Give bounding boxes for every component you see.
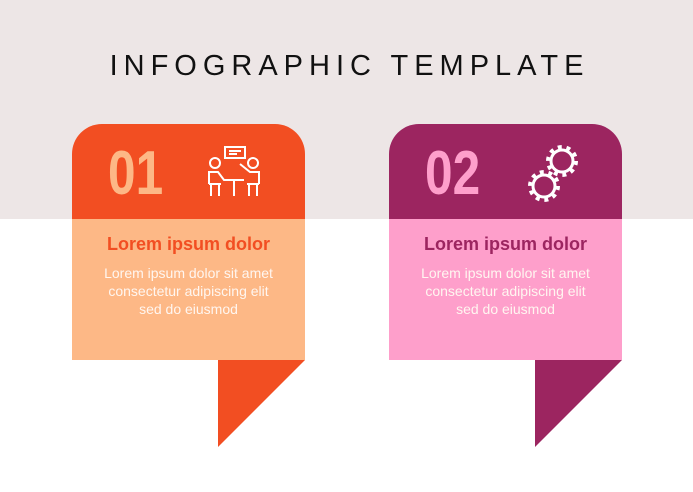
- heading 01: Lorem ipsum dolor: [107, 234, 270, 254]
- heading 02: Lorem ipsum dolor: [424, 234, 587, 254]
- header 02: [389, 124, 622, 220]
- pointer 02: [535, 360, 622, 447]
- header 01: [72, 124, 305, 220]
- text 02: Lorem ipsum dolor sit amet: [421, 265, 590, 281]
- text 01: sed do eiusmod: [139, 301, 238, 317]
- title: INFOGRAPHIC TEMPLATE: [110, 50, 589, 82]
- pointer 01: [218, 360, 305, 447]
- panel: card 01: [72, 124, 305, 447]
- text 02: sed do eiusmod: [456, 301, 555, 317]
- text 01: Lorem ipsum dolor sit amet: [104, 265, 273, 281]
- icon: meeting: [208, 146, 260, 196]
- body 02: [389, 219, 622, 360]
- panel: card 02: [389, 124, 622, 447]
- text 01: consectetur adipiscing elit: [108, 283, 269, 299]
- text 02: [421, 265, 590, 317]
- number 01: 01: [108, 139, 163, 208]
- text 02: consectetur adipiscing elit: [425, 283, 586, 299]
- body 01: [72, 219, 305, 360]
- number 02: 02: [425, 139, 480, 208]
- text 01: [104, 265, 273, 317]
- icon: gears: [528, 145, 578, 202]
